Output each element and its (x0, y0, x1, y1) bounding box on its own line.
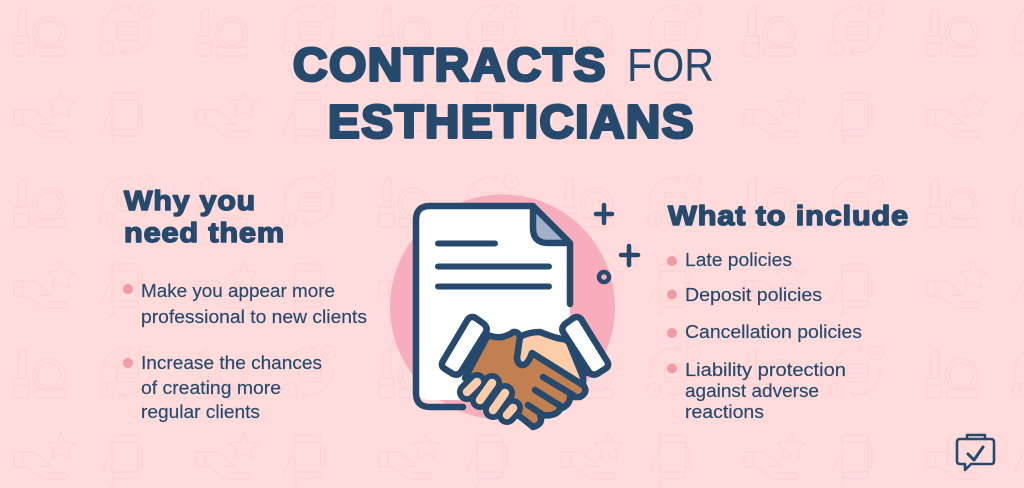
title: CONTRACTS (293, 38, 607, 90)
icon: document (416, 206, 570, 407)
title: ESTHETICIANS (328, 96, 695, 148)
bullet: professional (123, 281, 367, 327)
bullet: cancellation policies: Cancellation policies (685, 322, 862, 342)
bullet: liability protection: against adverse (685, 381, 819, 401)
panel: why you need them (123, 185, 367, 422)
bullet: regular clients: regular clients (141, 402, 260, 422)
heading: what to include: What to include (668, 200, 909, 231)
icon: handshake (442, 317, 608, 427)
heading: why you need them: Why you (124, 185, 256, 216)
icon: briefcase logo (957, 435, 994, 470)
fingers (467, 382, 513, 415)
bullet: regular clients: Increase the chances (141, 353, 322, 373)
title: FOR (627, 39, 714, 91)
peach hand (517, 332, 583, 385)
panel: what to include (667, 200, 909, 422)
cuffs (442, 317, 487, 375)
bullet: deposit policies: Deposit policies (685, 285, 822, 305)
bullet: regular clients: of creating more (141, 378, 281, 398)
bullet: liability protection (667, 360, 846, 422)
bullet: professional: professional to new clients (141, 307, 367, 327)
bullet: liability protection: reactions (685, 402, 764, 422)
icon: plus signs and ring (596, 205, 638, 282)
title (293, 38, 714, 148)
bullet: professional: Make you appear more (141, 281, 335, 301)
bullet: regular clients (123, 353, 322, 422)
heading: why you need them (124, 185, 285, 248)
heading: why you need them: need them (124, 217, 285, 248)
bullet: late policies: Late policies (685, 250, 792, 270)
bullet: liability protection: Liability protection (685, 360, 846, 380)
illustration: contract and handshake (390, 194, 638, 427)
pink circle (390, 194, 615, 420)
finger creases (528, 340, 587, 415)
brown hand (465, 332, 585, 427)
